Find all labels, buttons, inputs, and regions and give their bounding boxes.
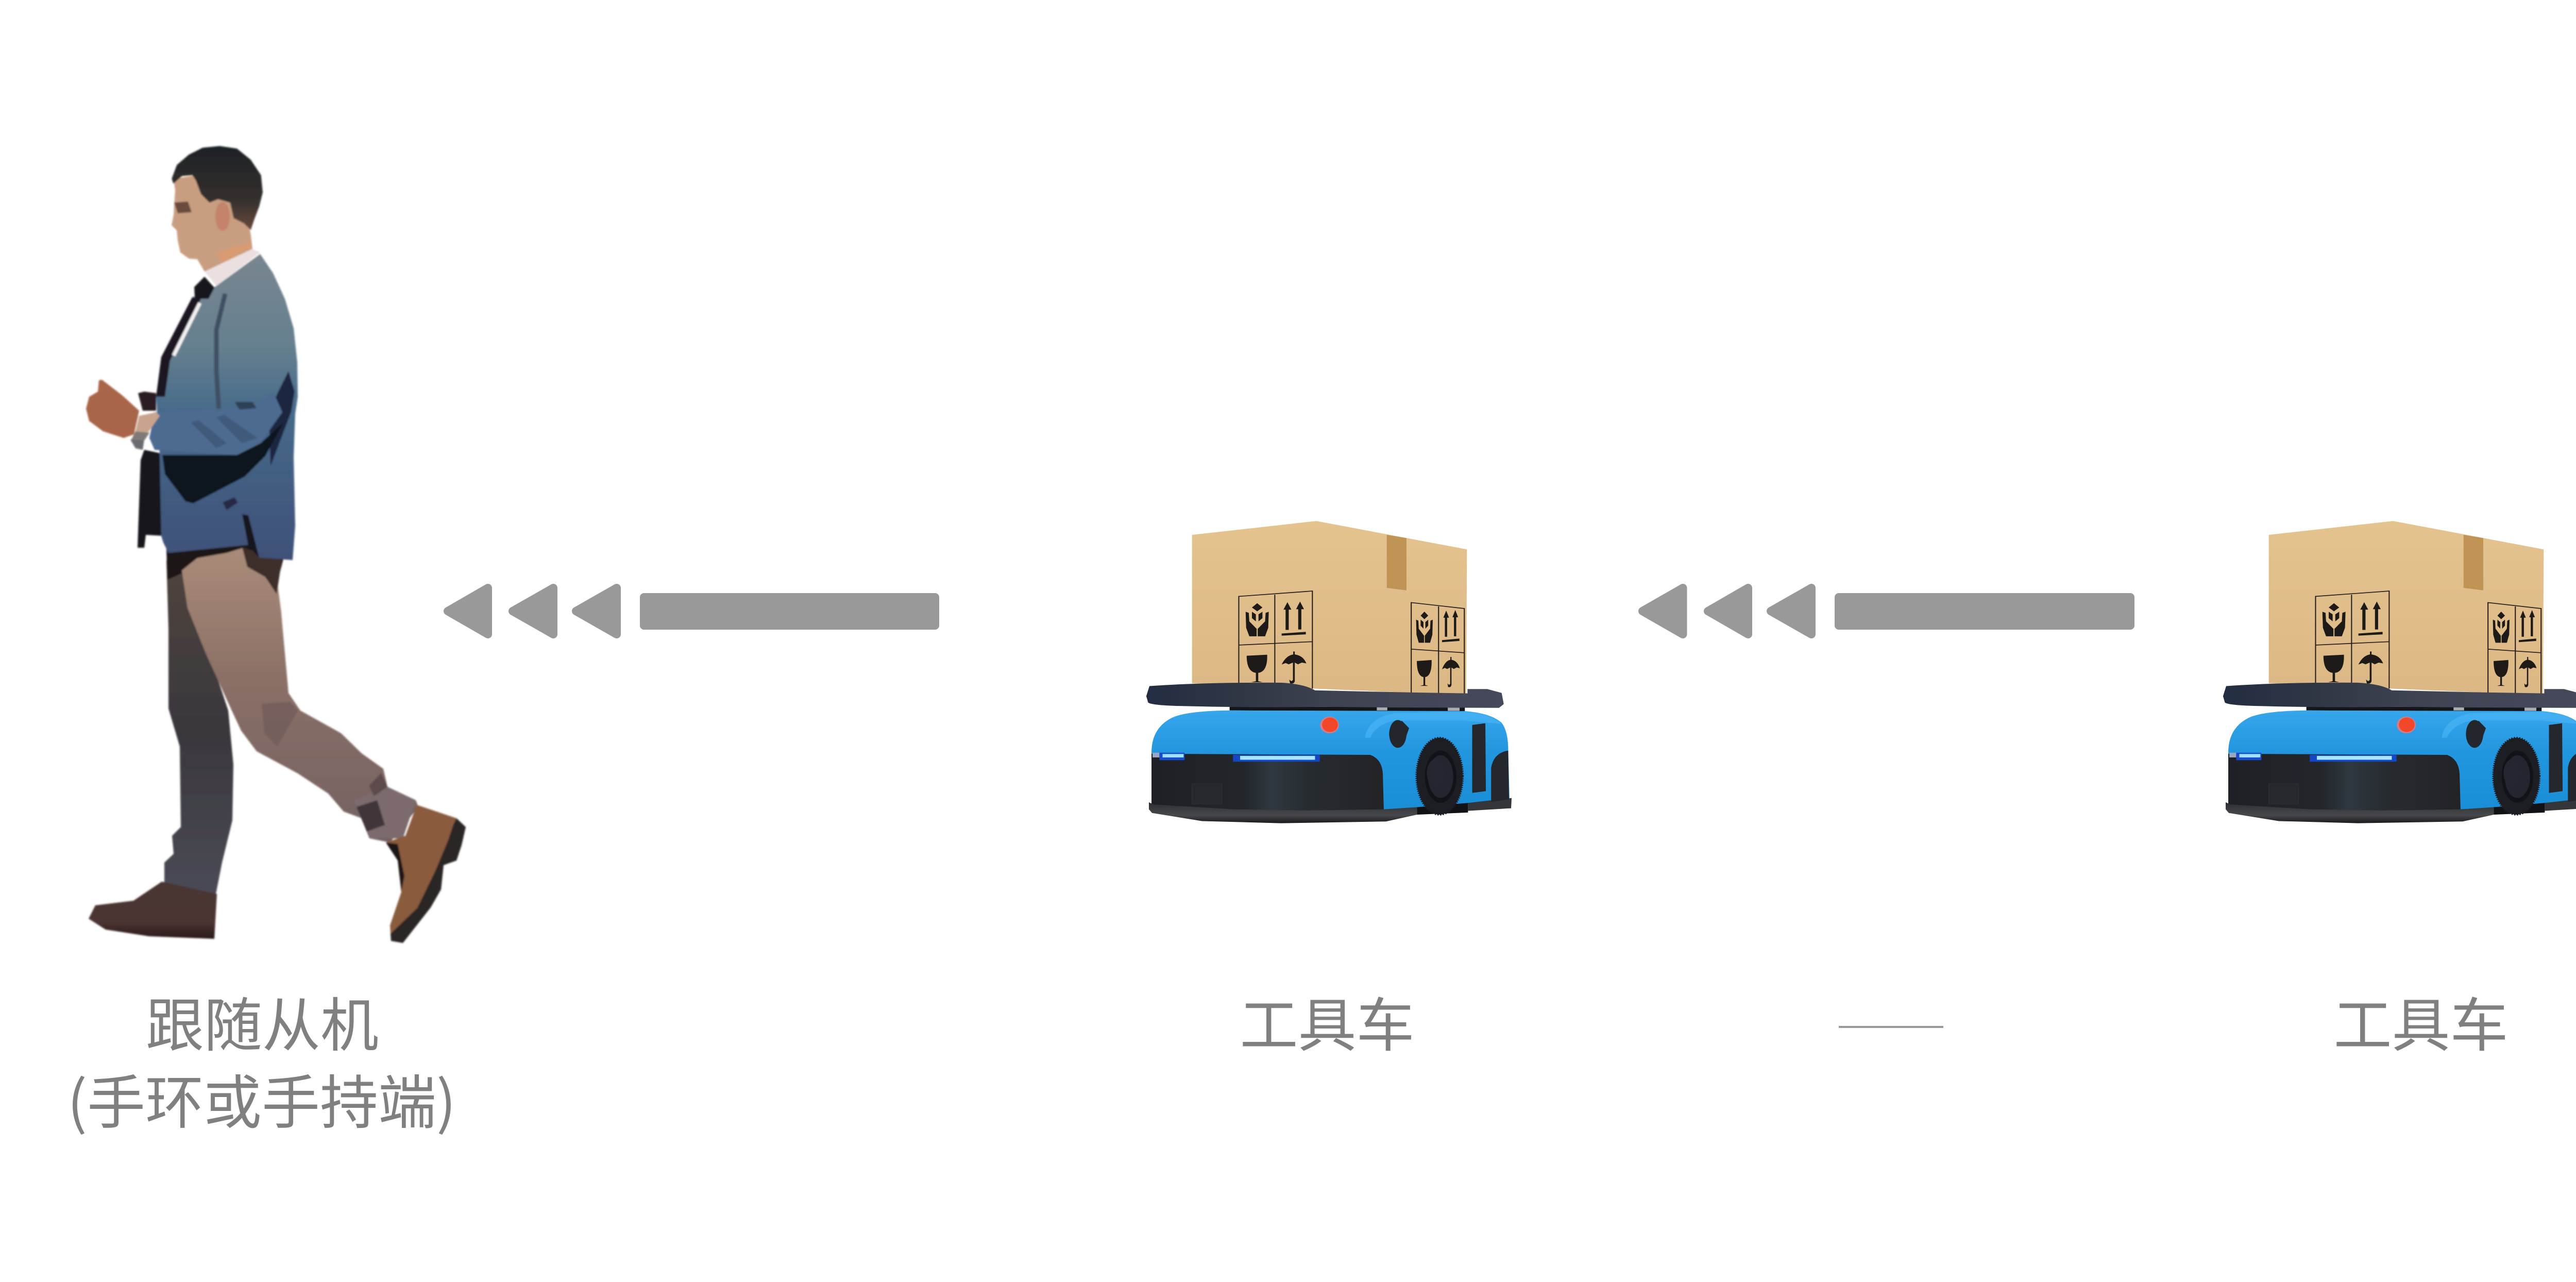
icon: umbrella xyxy=(1282,651,1307,684)
right shoe heel counter xyxy=(386,842,404,892)
trouser creases near the knee and ankle xyxy=(262,702,416,838)
ear xyxy=(215,202,230,231)
label grid, side face xyxy=(1411,602,1464,694)
icon: this way up arrows xyxy=(1282,601,1306,636)
wheel xyxy=(1416,738,1463,815)
face and neck xyxy=(172,175,252,272)
front leg, tan trousers xyxy=(182,548,418,842)
icon: wine glass xyxy=(1247,655,1267,682)
hand xyxy=(86,380,139,438)
sleeve xyxy=(149,392,282,455)
jacket shoulder seam xyxy=(216,294,225,412)
ellipsis dash between carts xyxy=(1839,1026,1943,1028)
wrist band xyxy=(138,392,156,411)
arrow shaft xyxy=(644,597,935,626)
lift platform xyxy=(1146,683,1504,708)
center LED strip xyxy=(1233,755,1320,762)
black front bumper xyxy=(1151,754,1384,814)
handling icons, side face xyxy=(1416,610,1460,687)
jacket pocket flap xyxy=(223,497,238,510)
jacket body xyxy=(156,254,298,560)
shirt collar xyxy=(205,249,260,286)
cuff xyxy=(130,412,160,450)
label: tool cart 1: 工具车 xyxy=(1240,979,1415,1063)
right shoe sole xyxy=(391,818,466,943)
eye and brow shadow xyxy=(174,201,192,213)
chevron 2 xyxy=(513,588,553,634)
arrow 2: pointing from last tool cart to first tool cart xyxy=(1642,588,2130,634)
red emergency stop button xyxy=(1320,717,1339,733)
chevron 1 xyxy=(448,588,488,634)
neck warm tone xyxy=(216,242,251,263)
label: follower xyxy=(67,979,456,1140)
arrow shaft xyxy=(1839,597,2130,626)
left shoe xyxy=(89,882,217,939)
rear under-shadow xyxy=(1417,803,1468,815)
label grid, front face xyxy=(1239,591,1312,688)
skirt xyxy=(1149,802,1417,823)
side slot xyxy=(1472,723,1486,793)
chevron 1 xyxy=(1642,588,1683,634)
chassis shadow and lift clips xyxy=(1230,707,1465,712)
dark jacket panel xyxy=(138,450,165,548)
arrow 1: pointing from tool cart to follower xyxy=(448,588,935,634)
handling icons, front face xyxy=(1246,601,1307,684)
icon: fragile contents, hands and package xyxy=(1246,603,1269,636)
label: tool cart 2: 工具车 xyxy=(2334,979,2508,1063)
shadow under the sleeve xyxy=(162,423,283,503)
jacket vent xyxy=(242,514,259,558)
hair xyxy=(172,146,263,230)
chevron 2 xyxy=(1708,588,1748,634)
label line 1: 跟随从机 xyxy=(146,979,379,1063)
right shoe xyxy=(386,805,466,943)
tie and shirt placket xyxy=(156,277,215,397)
back leg, dark trousers xyxy=(164,560,233,894)
lighter top-right body highlight xyxy=(1365,712,1502,738)
chevron 3 xyxy=(576,588,617,634)
jacket back shadow xyxy=(269,371,295,466)
person: follower walking left xyxy=(86,146,466,943)
robot 2: blue AGV carrying a carton xyxy=(2223,521,2576,823)
left LED strip xyxy=(1153,753,1184,760)
carton tape xyxy=(1387,535,1406,591)
chevron 3 xyxy=(1771,588,1811,634)
rear skirt xyxy=(1468,798,1512,811)
front sensor panel xyxy=(1192,784,1222,804)
rear black panel xyxy=(1491,751,1509,802)
label line 2: (手环或手持端) xyxy=(67,1056,456,1140)
carton xyxy=(1192,521,1467,695)
blue body xyxy=(1151,711,1510,811)
waist shadow xyxy=(166,544,283,585)
side knob xyxy=(1389,720,1409,748)
robot 1: blue AGV carrying a carton xyxy=(1146,521,1512,823)
dark fold beside the hip pocket xyxy=(242,547,282,594)
